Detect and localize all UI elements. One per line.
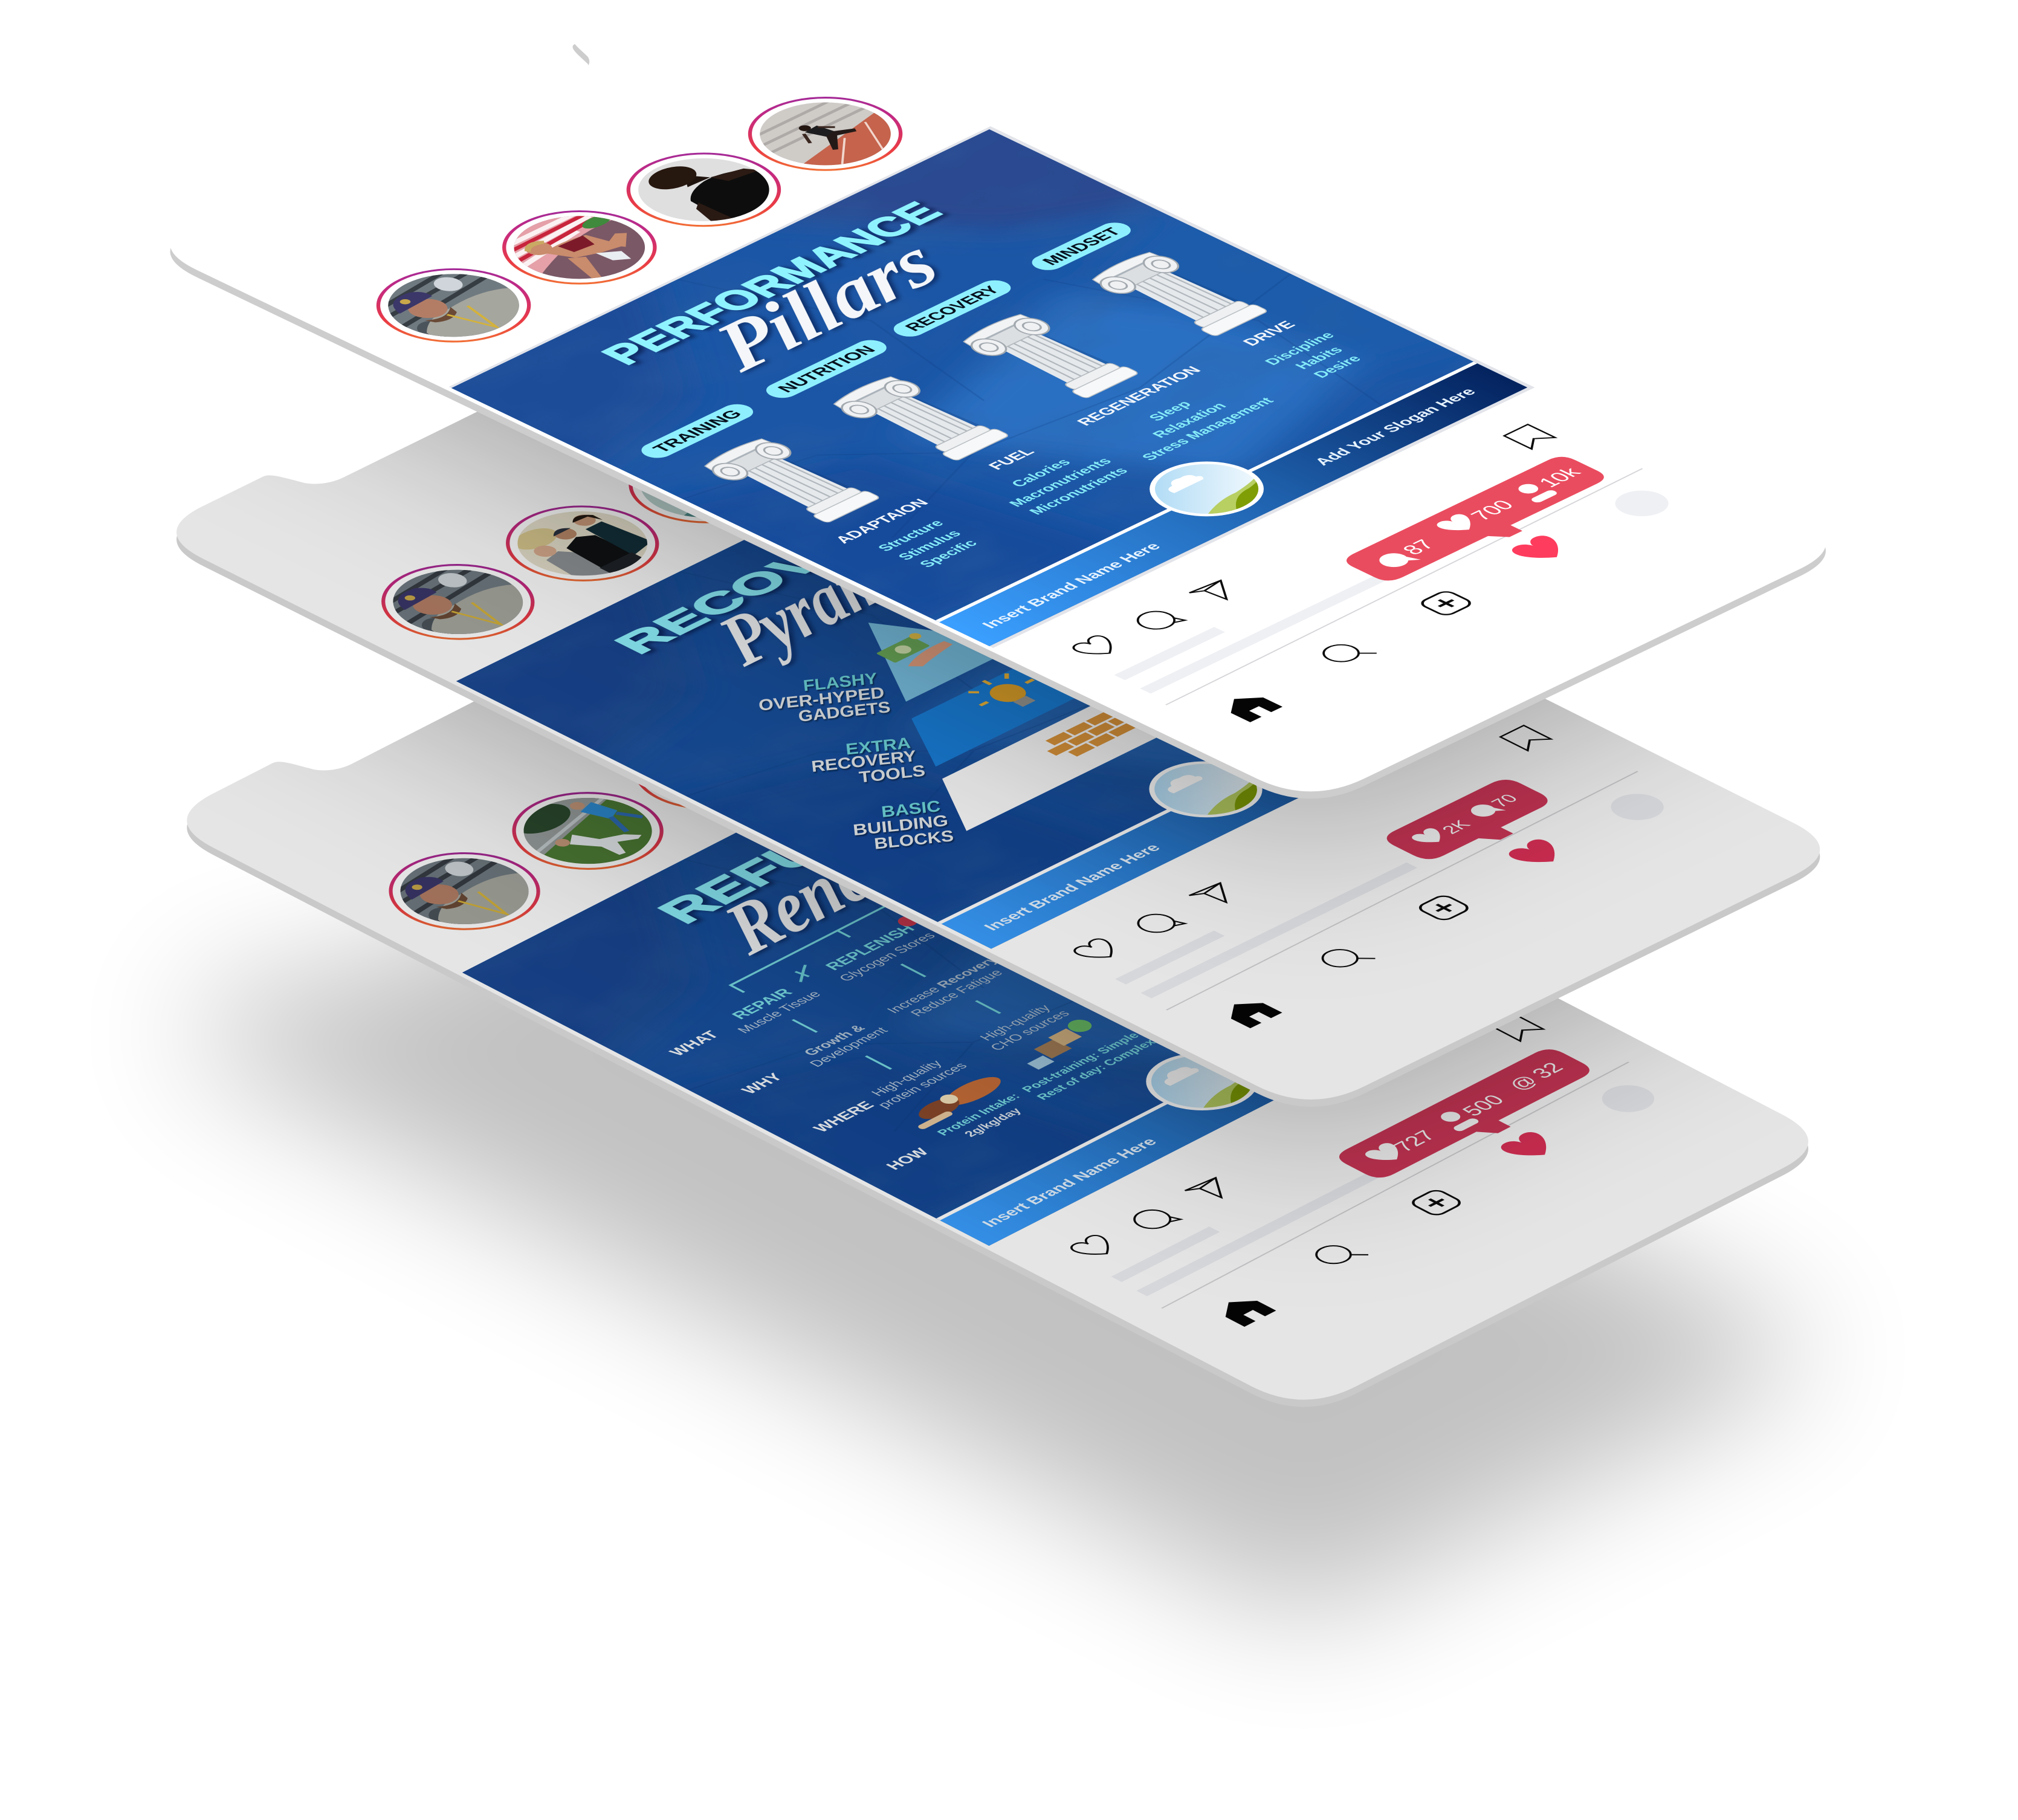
phone 2 surface content: [122, 253, 1878, 1126]
avatar: soccer players: [483, 777, 692, 884]
icon: red heart: [1508, 534, 1574, 566]
text: fuel list: FUEL: [985, 445, 1038, 472]
row labels: WHAT: [665, 1029, 723, 1058]
text: drive list: Habits: [1292, 345, 1347, 371]
column: repair: Development: [806, 1025, 891, 1069]
icon: bookmark: [1504, 424, 1555, 449]
icon: protein food: [899, 1073, 1011, 1130]
engagement counter: [1379, 776, 1567, 869]
brand band: [936, 949, 1516, 1246]
column: repair: [714, 977, 1041, 1147]
tree bracket: [731, 876, 959, 993]
pill: mindset: MINDSET: [1038, 225, 1126, 268]
avatar: coach: [347, 254, 560, 357]
engagement counter: 700: [1465, 497, 1519, 523]
icon: share: [1189, 882, 1243, 908]
pill: nutrition: NUTRITION: [774, 343, 880, 395]
text: regeneration list: Relaxation: [1149, 401, 1231, 440]
avatar: coach: [352, 549, 564, 654]
text: drive list: DRIVE: [1238, 319, 1299, 348]
column: replenish: [801, 902, 1187, 1102]
brand band: [938, 661, 1523, 949]
logo badge: [1126, 750, 1286, 829]
row labels: WHY: [737, 1070, 787, 1096]
pyramid tier labels: BASIC: [881, 797, 942, 821]
engagement counter: [1339, 453, 1623, 589]
engagement counter: 500: [1457, 1092, 1510, 1119]
panel: phone 3, Refuel and Renew: [187, 701, 1808, 1400]
refuel poster: [399, 671, 1548, 1262]
pyramid tier labels: [758, 669, 954, 853]
avatar: partly hidden: [600, 433, 811, 537]
text: fuel list: Macronutrients: [1006, 456, 1116, 509]
phone 1 surface content: [115, 0, 1885, 818]
engagement counter: 2K: [1438, 818, 1475, 837]
column: replenish: High-quality: [977, 1003, 1054, 1043]
phone 3 tone and cast shadow: [187, 701, 1808, 1400]
phone 3 surface content: [133, 533, 1866, 1427]
text: fuel list: Calories: [1008, 457, 1075, 489]
pyramid tier labels: RECOVERY: [810, 746, 917, 776]
pyramid tier labels: EXTRA: [845, 733, 912, 759]
text: regeneration list: Stress Management: [1139, 395, 1278, 462]
engagement counter: 727: [1389, 1127, 1441, 1155]
text: regeneration list: Sleep: [1145, 399, 1195, 423]
column: replenish: Rest of day: Complex CHO: [1033, 1023, 1187, 1102]
pyramid tier labels: OVER-HYPED: [758, 683, 885, 714]
icon: carbs food: [1008, 1017, 1110, 1070]
pill: training: [635, 401, 760, 461]
icon: red heart: [1505, 837, 1570, 870]
pyramid tier: extra: [873, 626, 1158, 766]
recovery poster: [392, 389, 1555, 965]
column: replenish: Post-training: Simple CHO: [1019, 1017, 1170, 1094]
avatar: sprinter in blocks: [473, 196, 686, 299]
column: mindset pillar: [1085, 248, 1274, 339]
icon: add post: [1409, 1188, 1464, 1217]
phone 2 edge: [150, 276, 1846, 1120]
row labels: HOW: [882, 1146, 933, 1172]
pyramid tier labels: BLOCKS: [873, 826, 954, 853]
column: replenish: REPLENISH: [821, 922, 919, 973]
engagement counter: 10k: [1533, 465, 1586, 490]
avatar: athlete profile: [597, 138, 810, 241]
title: Refuel: REFUEL: [646, 798, 902, 930]
icon: red heart: [1497, 1130, 1562, 1164]
text: fuel list: Micronutrients: [1026, 465, 1132, 517]
icon: bookmark: [1501, 725, 1551, 751]
pyramid tier labels: GADGETS: [797, 698, 891, 725]
engagement counter: 32: [1527, 1060, 1569, 1081]
column: recovery pillar: [956, 311, 1145, 401]
icon: share: [1185, 1176, 1238, 1203]
logo badge: [1123, 1041, 1281, 1122]
engagement counter: @: [1503, 1072, 1544, 1093]
performance pillars poster: [387, 99, 1559, 662]
brand name: Insert Brand Name Here: [980, 842, 1165, 933]
icon: like: [1068, 1234, 1121, 1261]
icon: search: [1316, 944, 1375, 973]
icon: like: [1071, 938, 1124, 963]
script title: Renew: Renew: [710, 814, 926, 970]
pyramid tier: flashy: [807, 593, 1027, 702]
column: replenish: Glycogen Stores: [836, 930, 939, 983]
icon: search: [1316, 639, 1377, 668]
avatar ring: partly hidden: [605, 717, 814, 824]
icon: bookmark: [1493, 1015, 1544, 1041]
engagement counter: [1332, 1046, 1609, 1188]
text: drive list: [1229, 315, 1376, 385]
pill: training: TRAINING: [648, 408, 747, 455]
ground shadow: [161, 760, 1835, 1625]
infographic canvas: [167, 44, 1829, 1666]
engagement counter: 87: [1397, 537, 1440, 557]
brand name: Insert Brand Name Here: [978, 540, 1165, 630]
column: repair: protein sources: [875, 1061, 971, 1110]
icon: like: [1070, 634, 1124, 660]
logo badge: [1126, 450, 1287, 528]
text: regeneration list: [1069, 362, 1278, 462]
column: repair: High-quality: [868, 1058, 946, 1098]
text: adaptation list: Stimulus: [894, 528, 965, 562]
icon: share: [1189, 579, 1243, 605]
column: replenish: Increase Recovery: [884, 954, 1001, 1015]
icon: comment: [1131, 910, 1185, 937]
caption bars and divider: [1106, 1037, 1683, 1332]
pill: mindset: [1026, 219, 1137, 273]
column: replenish: CHO sources: [987, 1008, 1073, 1052]
column: training pillar: [697, 435, 886, 526]
engagement counter: 70: [1487, 792, 1522, 809]
caption bars and divider: [1109, 445, 1697, 728]
icon: scissors tool: [786, 965, 820, 982]
pyramid tier labels: BUILDING: [852, 811, 949, 839]
row labels: [664, 1023, 951, 1172]
text: regeneration list: REGENERATION: [1073, 364, 1205, 428]
icon: home: [1213, 1294, 1276, 1327]
text: adaptation list: ADAPTAION: [831, 497, 933, 546]
icon: comment: [1127, 1205, 1181, 1233]
avatar: group of friends: [477, 491, 688, 596]
pyramid tier labels: FLASHY: [802, 669, 878, 695]
text: adaptation list: Specific: [916, 538, 982, 569]
brand band: [936, 361, 1527, 646]
column: replenish: Reduce Fatigue: [907, 968, 1006, 1018]
icon: home: [1218, 997, 1282, 1028]
text: drive list: Desire: [1310, 354, 1365, 380]
row labels: WHERE: [809, 1099, 878, 1135]
caption bars and divider: [1110, 746, 1692, 1034]
pill: recovery: [887, 277, 1017, 340]
column: repair: Growth &: [800, 1023, 868, 1058]
slogan: Add Your Slogan Here: [1310, 386, 1480, 467]
script title: Pillars: Pillars: [699, 222, 952, 386]
icon: comment: [1130, 607, 1185, 633]
icon: add post: [1416, 894, 1472, 922]
title: Recovery: RECOVERY: [604, 493, 943, 659]
panel: phone 1, Performance Pillars: [115, 0, 1885, 818]
icon: red marker: [894, 915, 921, 928]
pill: nutrition: [760, 337, 893, 401]
avatar: runner on track: [719, 83, 932, 185]
pyramid tier labels: TOOLS: [858, 761, 926, 786]
avatar: coach: [360, 838, 569, 945]
column: repair: Muscle Tissue: [734, 989, 824, 1035]
poster edge: [449, 126, 1535, 648]
pyramid tier: basic: [902, 642, 1286, 831]
text: drive list: Discipline: [1261, 330, 1339, 367]
icon: search: [1309, 1240, 1368, 1270]
script title: Pyramid: Pyramid: [703, 514, 952, 681]
text: adaptation list: [831, 497, 999, 577]
phone 3 edge: [161, 556, 1835, 1420]
icon: home: [1218, 691, 1282, 722]
column: nutrition pillar: [826, 373, 1015, 464]
phone 1 edge: [143, 0, 1852, 812]
pill: recovery: RECOVERY: [901, 284, 1004, 334]
column: repair: REPAIR: [728, 986, 797, 1022]
text: fuel list: [956, 432, 1134, 517]
icon: add post: [1418, 590, 1474, 617]
column: repair: Protein Intake:: [934, 1092, 1023, 1138]
title: Performance: PERFORMANCE: [592, 197, 952, 370]
column: repair: 2g/kg/day: [962, 1106, 1025, 1139]
text: adaptation list: Structure: [875, 518, 948, 553]
brand name: Insert Brand Name Here: [978, 1136, 1161, 1229]
